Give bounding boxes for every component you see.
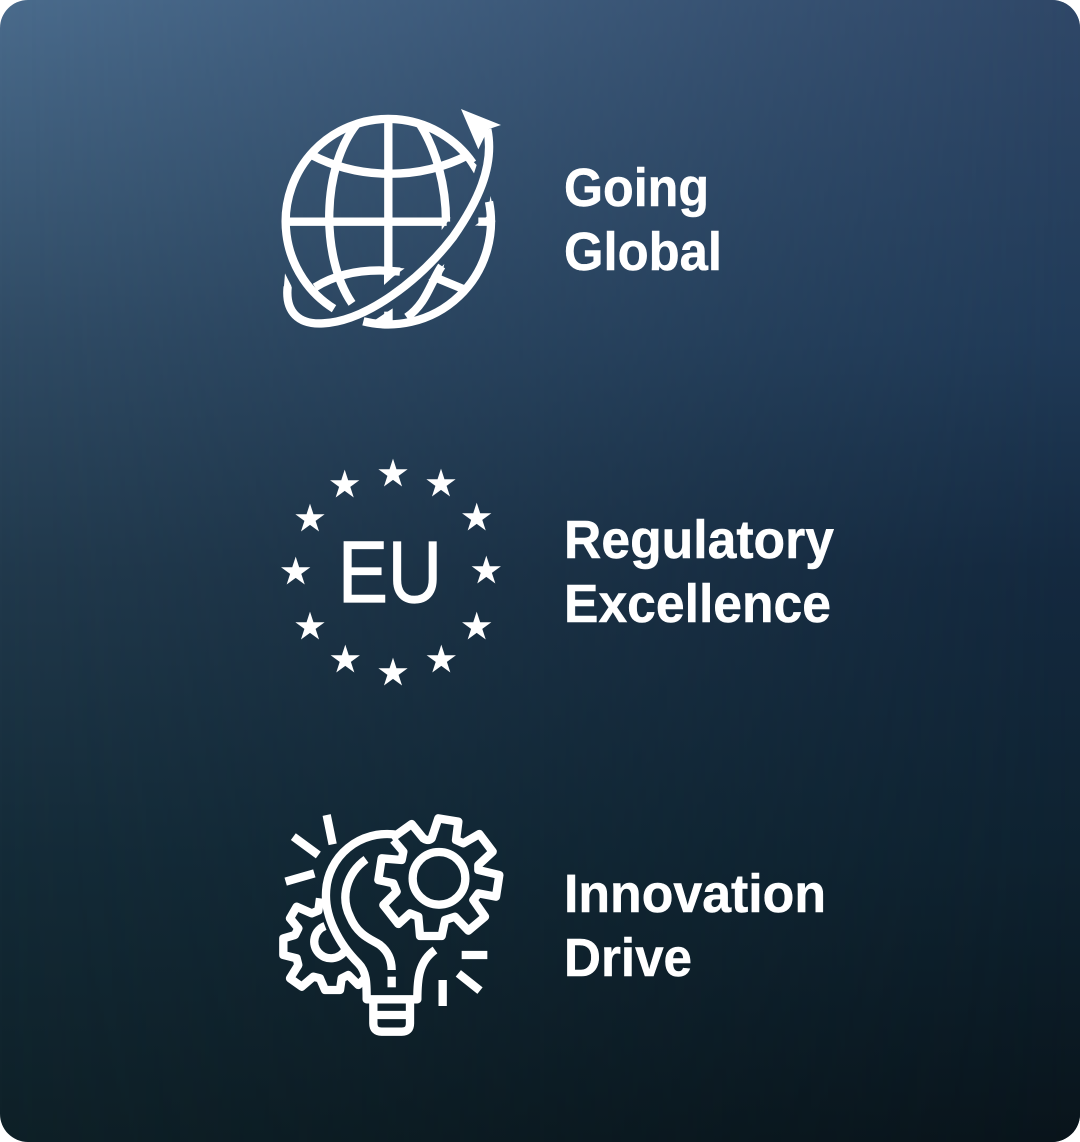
small gear xyxy=(283,898,366,990)
heading: Going Global xyxy=(564,158,722,282)
heading: Regulatory Excellence: Excellence xyxy=(564,574,831,634)
heading: Innovation Drive: Innovation xyxy=(564,864,826,924)
heading: Innovation Drive xyxy=(564,864,826,988)
icon: globe with orbit arrow xyxy=(284,109,501,325)
icon: EU stars circle xyxy=(281,459,501,685)
heading: Regulatory Excellence: Regulatory xyxy=(564,510,834,570)
heading: Going Global: Global xyxy=(564,222,722,282)
icon: light bulb with gears xyxy=(283,815,499,1032)
big gear xyxy=(378,818,499,936)
heading: Going Global: Going xyxy=(564,158,709,218)
arrow head xyxy=(461,109,501,149)
icon: EU stars circle: EU xyxy=(338,524,442,621)
heading: Innovation Drive: Drive xyxy=(564,928,692,988)
heading: Regulatory Excellence xyxy=(564,510,834,634)
